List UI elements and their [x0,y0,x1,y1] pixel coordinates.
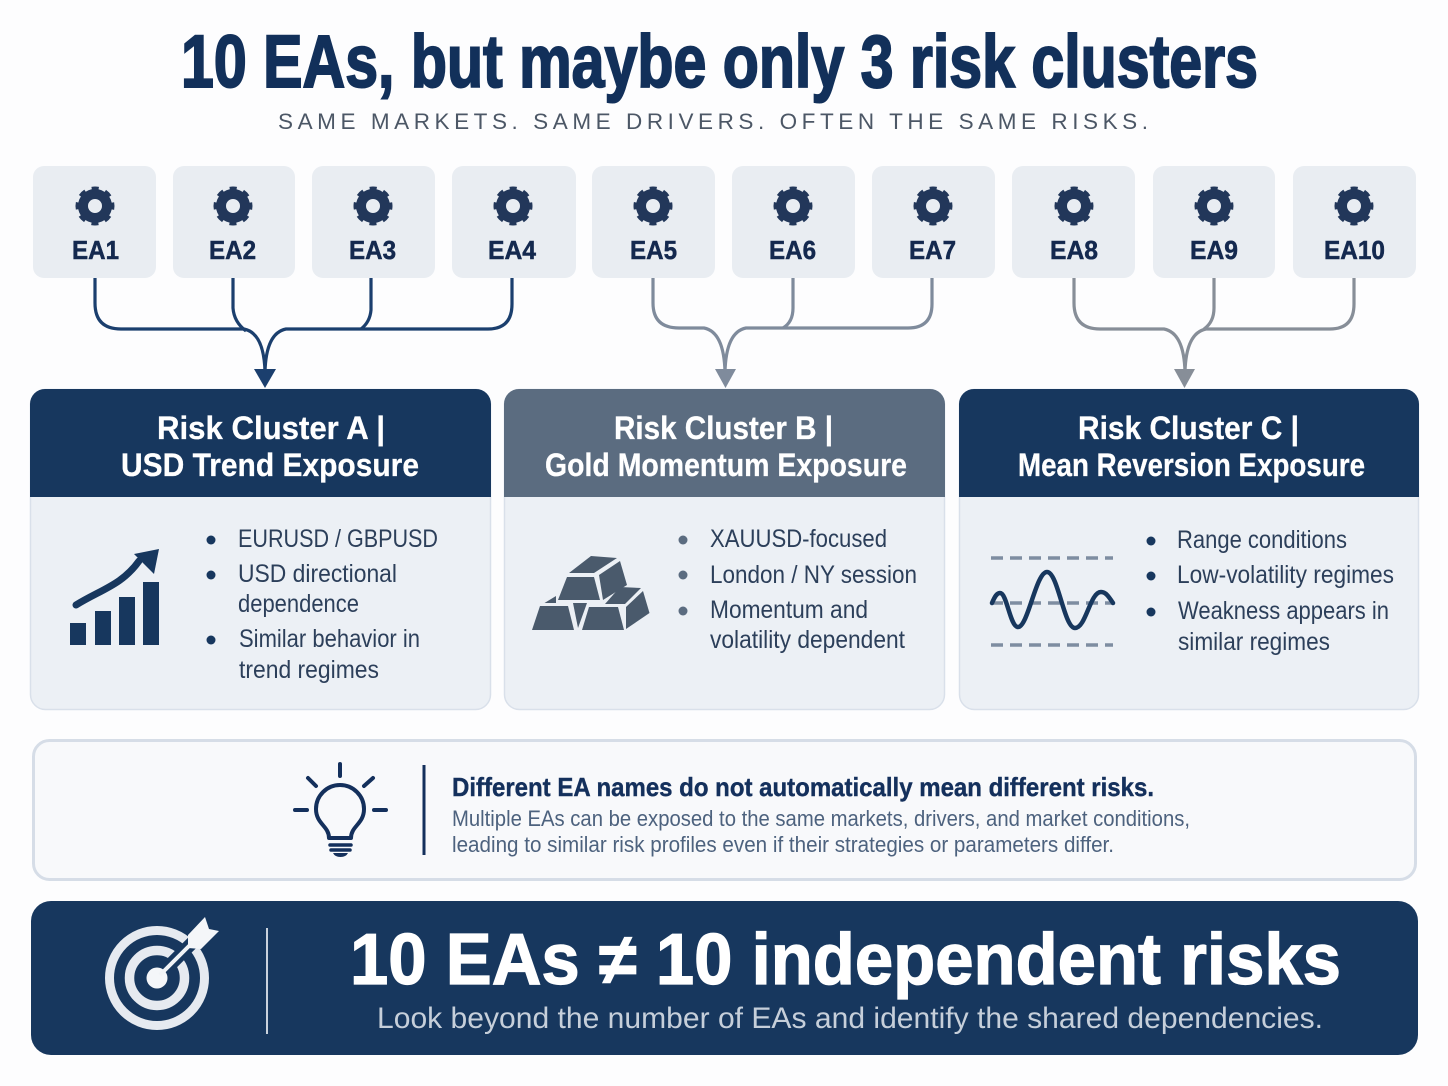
callout: key insight [34,740,1416,880]
arrow: EA5-7 into cluster B [653,278,932,388]
header: cluster C: Mean Reversion Exposure [1018,447,1365,483]
card: EA6 [732,166,855,278]
subtitle: SAME MARKETS. SAME DRIVERS. OFTEN THE SAME RISKS. [278,109,1148,134]
bullet list: cluster C: Range conditions [1177,526,1347,554]
card: EA8: EA8 [1050,235,1098,265]
card: EA3: EA3 [349,235,396,265]
header: cluster B: Risk Cluster B | [614,410,833,446]
callout heading: Different EA names do not automatically mean different risks. [452,772,1154,802]
icon: gold bars [532,556,650,630]
card: EA9 [1153,166,1275,278]
card: EA6: EA6 [769,235,816,265]
bullet list: cluster B: volatility dependent [710,626,905,654]
bullet list: cluster A [206,525,438,684]
banner: conclusion [31,901,1418,1055]
card: EA2: EA2 [209,235,256,265]
bullet list: cluster A: Similar behavior in [239,625,420,653]
header: cluster A [30,389,491,497]
icon: mean reversion wave [991,558,1113,645]
bullet list: cluster C: Low-volatility regimes [1177,561,1394,589]
card: EA7 [872,166,995,278]
icon: light bulb [295,764,386,857]
icon: target with arrow [110,917,219,1026]
bullet list: cluster A: USD directional [238,560,397,588]
header: cluster C: Risk Cluster C | [1078,410,1299,446]
panel: risk cluster B [504,389,945,710]
bullet list: cluster A: dependence [238,590,359,618]
header: cluster A: Risk Cluster A | [157,410,385,446]
card: EA8 [1012,166,1135,278]
bullet list: cluster C [1146,526,1394,656]
arrow: EA8-10 into cluster C [1074,278,1354,388]
card: EA1: EA1 [72,235,119,265]
header: cluster A: USD Trend Exposure [121,447,419,483]
header: cluster B: Gold Momentum Exposure [545,447,907,483]
bullet list: cluster A: EURUSD / GBPUSD [238,525,438,553]
callout body: Multiple EAs can be exposed to the same markets, drivers, and market conditions, [452,806,1190,831]
bullet list: cluster C: similar regimes [1178,628,1330,656]
panel: risk cluster C [959,389,1419,710]
card: EA4: EA4 [488,235,537,265]
bullet list: cluster C: Weakness appears in [1178,597,1389,625]
card: EA4 [452,166,576,278]
divider line [422,765,426,855]
card: EA5: EA5 [630,235,677,265]
divider line [266,928,268,1034]
bullet list: cluster B: London / NY session [710,561,917,589]
header: cluster B [504,389,945,497]
bullet list: cluster B: Momentum and [710,596,868,624]
card: EA7: EA7 [909,235,956,265]
EA cards row [33,166,1416,278]
callout body: leading to similar risk profiles even if their strategies or parameters differ. [452,832,1114,857]
arrow: EA1-4 into cluster A [95,278,512,388]
bullet list: cluster B: XAUUSD-focused [710,525,887,553]
panel: risk cluster A [30,389,491,710]
card: EA3 [312,166,435,278]
card: EA1 [33,166,156,278]
card: EA10: EA10 [1324,235,1385,265]
card: EA10 [1293,166,1416,278]
banner subtext: Look beyond the number of EAs and identify the shared dependencies. [377,1002,1323,1035]
card: EA5 [592,166,715,278]
card: EA9: EA9 [1190,235,1238,265]
bullet list: cluster A: trend regimes [239,656,379,684]
bullet list: cluster B [678,525,917,654]
icon: rising bar chart [70,549,159,645]
banner headline: 10 EAs ≠ 10 independent risks [350,920,1341,1000]
card: EA2 [173,166,295,278]
header: cluster C [959,389,1419,497]
callout body [452,806,1190,857]
